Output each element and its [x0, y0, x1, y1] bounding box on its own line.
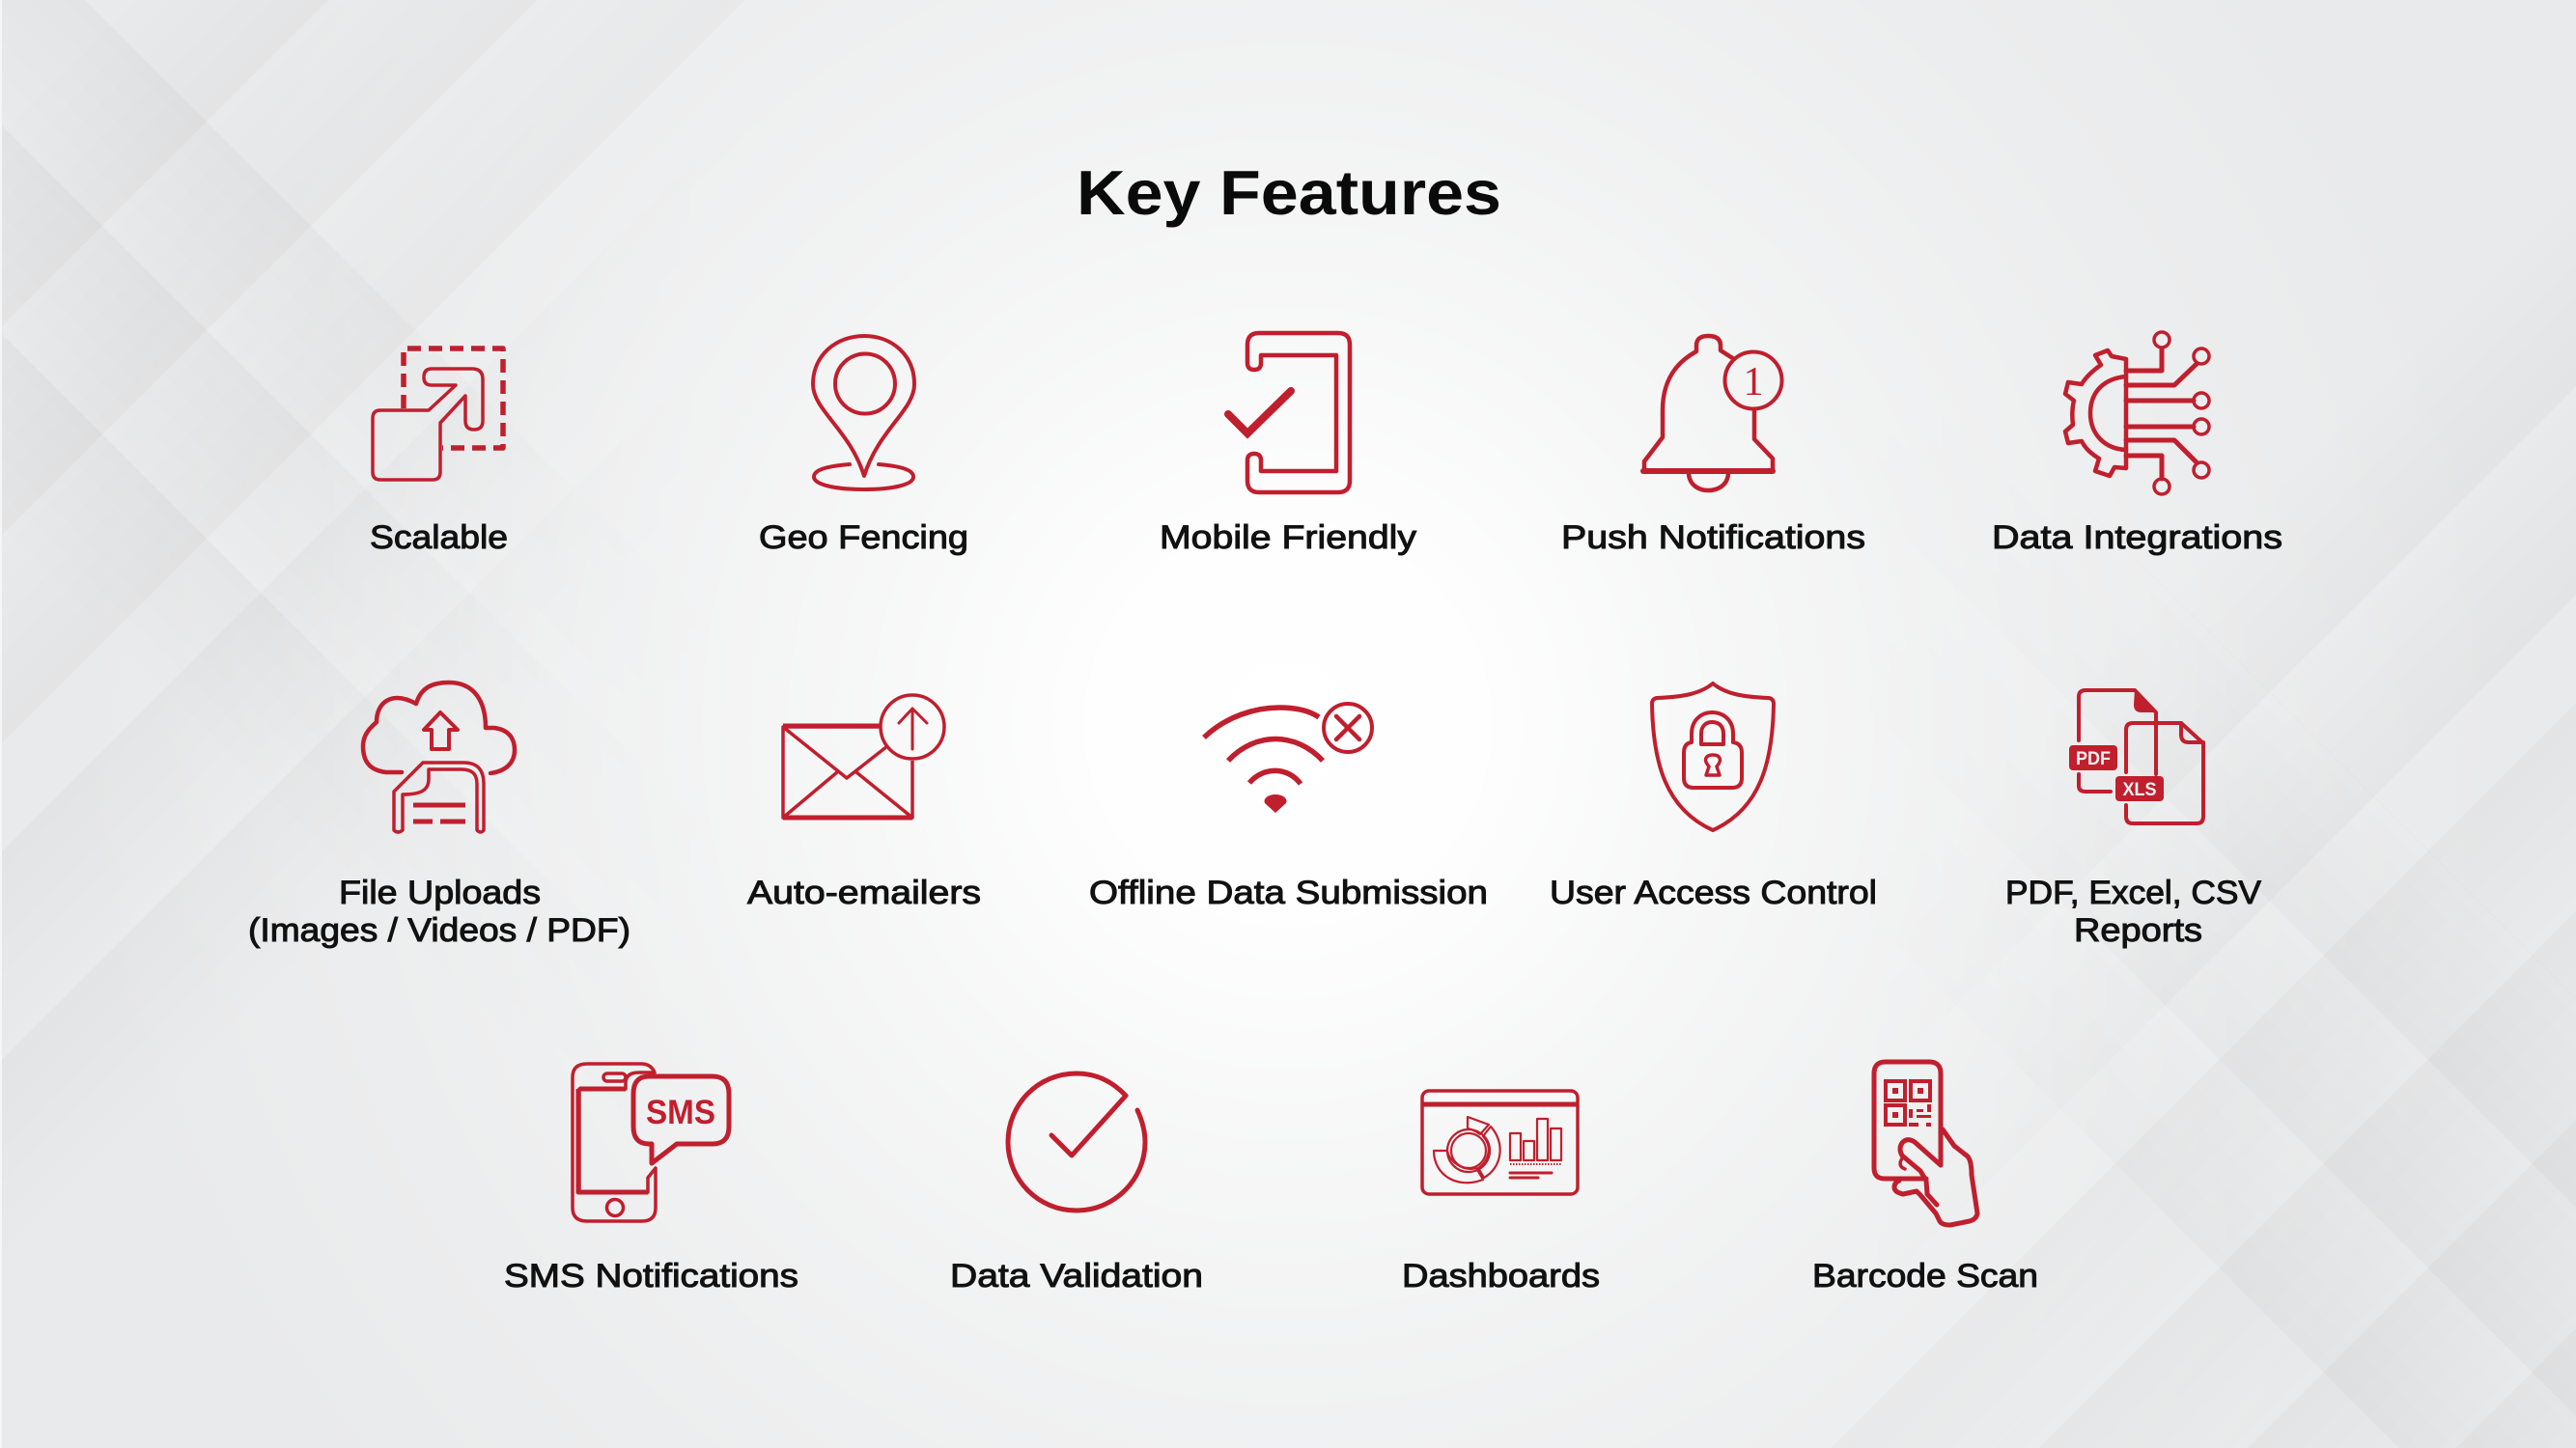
icon: wifi off — [1204, 704, 1372, 813]
feature: Data Integrations — [1992, 332, 2282, 556]
feature: Scalable — [370, 348, 508, 556]
icon: phone with sms bubble: SMS — [646, 1094, 715, 1131]
title: Key Features — [1077, 157, 1501, 228]
feature: Auto-emailers — [747, 695, 981, 911]
label: Data Integrations — [1992, 519, 2282, 556]
feature: Mobile Friendly — [1160, 333, 1416, 556]
feature: PDF, Excel, CSV Reports — [2005, 689, 2261, 949]
label: Offline Data Submission — [1089, 875, 1488, 911]
icon: pdf and xls files — [2069, 689, 2203, 823]
feature: Offline Data Submission — [1089, 704, 1488, 911]
label: Dashboards — [1402, 1258, 1600, 1295]
icon: pdf and xls files: XLS — [2122, 780, 2157, 800]
icon: map pin — [813, 336, 914, 489]
label: Push Notifications — [1561, 519, 1865, 556]
icon: shield lock — [1652, 683, 1774, 830]
icon: bell with badge: 1 — [1744, 360, 1763, 404]
icon: mobile with tick — [1228, 333, 1350, 492]
icon: bell with badge — [1643, 336, 1782, 490]
label: PDF, Excel, CSV — [2005, 875, 2261, 911]
label: File Uploads — [339, 875, 541, 911]
feature: Push Notifications — [1561, 336, 1865, 556]
label: Geo Fencing — [759, 519, 968, 556]
feature: Dashboards — [1402, 1091, 1600, 1295]
feature: User Access Control — [1550, 683, 1877, 911]
label line 2: (Images / Videos / PDF) — [248, 912, 630, 949]
icon: phone with sms bubble — [573, 1064, 729, 1221]
label: Scalable — [370, 519, 508, 556]
label: Mobile Friendly — [1160, 519, 1416, 556]
feature: File Uploads — [248, 682, 630, 949]
icon: hand holding qr phone — [1874, 1062, 1977, 1225]
icon: check circle — [1008, 1073, 1145, 1211]
icon: cloud upload — [363, 682, 515, 832]
label: Data Validation — [950, 1258, 1203, 1295]
icon: pdf and xls files: PDF — [2076, 749, 2111, 769]
label: Auto-emailers — [747, 875, 981, 911]
icon: gear circuit — [2065, 332, 2209, 494]
label: SMS Notifications — [504, 1258, 798, 1295]
icon: scalable — [373, 348, 503, 480]
icon: dashboard window — [1422, 1091, 1578, 1194]
icon: envelope with upload — [783, 695, 944, 818]
label: Barcode Scan — [1812, 1258, 2038, 1295]
feature: SMS Notifications — [504, 1064, 798, 1295]
feature: Geo Fencing — [759, 336, 968, 556]
feature: Barcode Scan — [1812, 1062, 2038, 1295]
feature: Data Validation — [950, 1073, 1203, 1295]
label: User Access Control — [1550, 875, 1877, 911]
label line 2: Reports — [2074, 912, 2202, 949]
